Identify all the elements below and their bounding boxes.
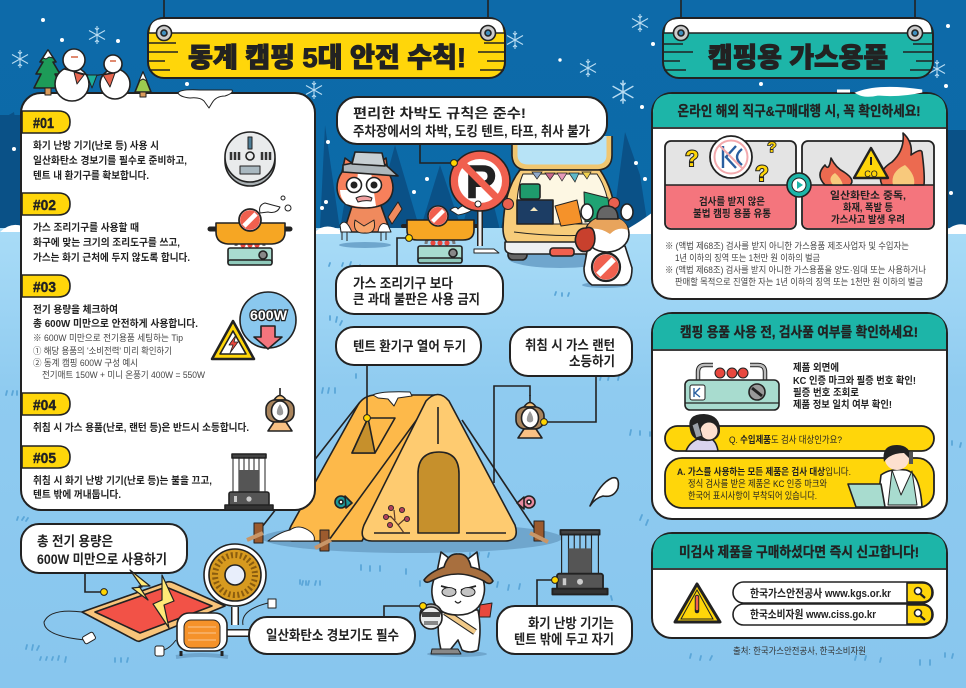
icon: play arrow (787, 173, 811, 197)
lantern with callout line (494, 376, 596, 483)
fan (204, 544, 276, 633)
icon: warning triangle (675, 584, 720, 622)
legal notes: 판매할 목적으로 진열한 자는 1년 이하의 징역 또는 1천만 원 이하의 벌금 (675, 276, 923, 287)
rule 02: 화구에 맞는 크기의 조리도구를 쓰고, (33, 236, 180, 249)
card: accident risks: 일산화탄소 중독, (830, 189, 906, 202)
rule 02: 가스 조리기구를 사용할 때 (33, 221, 139, 234)
no parking sign (450, 151, 510, 253)
card: accident risks: 화재, 폭발 등 (843, 201, 893, 214)
rule 01: 일산화탄소 경보기를 필수로 준비하고, (33, 154, 187, 167)
title banner: gas products (663, 0, 933, 78)
icon: oversized pan on stove (210, 196, 291, 265)
rule 05 (22, 446, 212, 501)
callout: no car camping (337, 97, 607, 166)
check instructions: 제품 정보 일치 여부 확인! (793, 398, 892, 411)
icon: lantern (266, 388, 294, 431)
electric mat (44, 570, 225, 644)
snow pile (268, 527, 314, 541)
open car with camping gear (502, 136, 620, 268)
search bar: Korea Consumer Agency: 한국소비자원 www.ciss.go.kr (750, 607, 877, 621)
rule 01 (22, 111, 187, 182)
stars and snowflakes (12, 14, 953, 210)
legal notes (665, 240, 926, 287)
icon: woman on phone (686, 414, 720, 451)
callout: open tent vent: 텐트 환기구 열어 두기 (353, 339, 466, 354)
tent (247, 392, 548, 551)
rule 03: ※ 600W 미만으로 전기용품 세팅하는 Tip (33, 333, 183, 343)
check instructions: KC 인증 마크와 필증 번호 확인! (793, 374, 916, 387)
rule 04: #04 (33, 397, 57, 414)
rule 04: 취침 시 가스 용품(난로, 랜턴 등)은 반드시 소등합니다. (33, 421, 249, 434)
panel: report uninspected products (652, 533, 947, 638)
rule 04 (22, 393, 249, 434)
gas stove with oversized griddle (403, 205, 478, 263)
source note: 출처: 한국가스안전공사, 한국소비자원 (733, 645, 866, 656)
legal notes: ※ (액법 제68조) 검사를 받지 아니한 가스용품을 양도·임대 또는 사용하거나 (665, 264, 926, 275)
card: illegal products: ? (767, 139, 777, 156)
snow drip on panel (178, 90, 232, 108)
tent clips (335, 496, 352, 508)
rule 03: 전기 용량을 체크하여 (33, 303, 118, 316)
tent vent (352, 418, 395, 453)
legal notes: ※ (액법 제68조) 검사를 받지 아니한 가스용품 제조사업자 및 수입자는 (665, 240, 909, 251)
rule 05: 취침 시 화기 난방 기기(난로 등)는 불을 끄고, (33, 474, 212, 487)
title banner: gas products: 캠핑용 가스용품 (708, 43, 888, 73)
hamster with no sign (575, 204, 633, 288)
callout: open tent vent (336, 327, 481, 421)
panel: overseas purchase warning (652, 88, 947, 299)
stakes (254, 521, 544, 551)
callout: total power: 총 전기 용량은 (37, 534, 113, 549)
card: accident risks: 가스사고 발생 우려 (831, 213, 905, 226)
answer bar: 정식 검사를 받은 제품은 KC 인증 마크와 (688, 478, 827, 490)
answer bar: 한국어 표시사항이 부착되어 있습니다. (688, 490, 817, 502)
small electric heater (155, 613, 228, 657)
callout: no oversized griddle: 가스 조리기구 보다 (353, 276, 454, 291)
search bar: KGS (733, 582, 933, 603)
rule 02: 가스는 화기 근처에 두지 않도록 합니다. (33, 251, 190, 264)
card: illegal products: 불법 캠핑 용품 유통 (693, 207, 771, 220)
night sky background (0, 0, 966, 240)
shadow under tent (262, 523, 562, 553)
callout: turn off lantern: 취침 시 가스 랜턴 (525, 338, 615, 353)
icon: gas stove with KC mark (685, 365, 779, 410)
callout: total power: 600W 미만으로 사용하기 (37, 552, 167, 567)
answer bar (665, 458, 934, 508)
callout: total power (21, 524, 187, 595)
white cat explorer (420, 552, 493, 657)
icon: crossed KC mark (710, 136, 752, 178)
card: accident risks (802, 133, 934, 229)
icon: kerosene heater (225, 454, 273, 510)
callout: turn off lantern (510, 327, 632, 376)
icon: call center agent (848, 445, 922, 507)
rule 05: #05 (33, 450, 56, 467)
boxes and cushion (520, 184, 540, 199)
search bar: KGS: 한국가스안전공사 www.kgs.or.kr (750, 586, 892, 600)
callout: no oversized griddle (336, 238, 503, 314)
panel: check certification (652, 313, 947, 519)
check instructions: 필증 번호 조회로 (793, 386, 859, 399)
rule 03: ① 해당 용품의 '소비전력' 미리 확인하기 (33, 345, 172, 356)
orange cat (337, 152, 402, 248)
panel: check certification: 캠핑 용품 사용 전, 검사품 여부를 확인하세요! (680, 324, 918, 340)
heater by the tent (537, 478, 618, 606)
search bar: Korea Consumer Agency (733, 604, 933, 625)
rule 03: 전기매트 150W + 미니 온풍기 400W = 550W (42, 370, 205, 380)
bunting (532, 172, 591, 182)
panel: overseas purchase warning: 온라인 해외 직구&구매대행 시, 꼭 확인하세요! (678, 103, 920, 119)
snowmen and trees (34, 49, 151, 101)
callout: heater outside tent: 화기 난방 기기는 (528, 616, 614, 631)
icon: carbon monoxide alarm (225, 132, 275, 186)
snow on panel (837, 88, 922, 95)
icon: handheld alarm (420, 604, 442, 629)
rule 02: #02 (33, 197, 56, 214)
rule 03: 총 600W 미만으로 안전하게 사용합니다. (33, 317, 198, 330)
rule 03: #03 (33, 279, 56, 296)
callout: heater outside tent: 텐트 밖에 두고 자기 (514, 632, 614, 647)
callout: turn off lantern: 소등하기 (569, 354, 615, 369)
title banner: winter camping rules: 동계 캠핑 5대 안전 수칙! (188, 43, 466, 73)
card: illegal products: ? (755, 161, 769, 186)
panel: five safety rules (21, 90, 315, 510)
no parking sign: P (466, 156, 496, 208)
forest silhouette (0, 112, 966, 240)
icon: lightning bolts (130, 570, 174, 628)
snow on tent (373, 392, 412, 406)
snowy ground (0, 228, 966, 688)
callout: CO alarm required: 일산화탄소 경보기도 필수 (266, 628, 399, 643)
legal notes: 1년 이하의 징역 또는 1천만 원 이하의 벌금 (675, 253, 820, 263)
question marks: ? (685, 146, 699, 171)
rule 05: 텐트 밖에 꺼내둡니다. (33, 488, 121, 501)
icon: flames (820, 133, 924, 185)
icon: 600W limit: 600W (250, 307, 288, 323)
question bar: Q. 수입제품도 검사 대상인가요? (729, 434, 842, 446)
rule 02 (22, 193, 190, 264)
answer bar: A. 가스를 사용하는 모든 제품은 검사 대상입니다. (677, 466, 851, 478)
check instructions: 제품 외면에 (793, 361, 839, 374)
card: illegal products: 검사를 받지 않은 (699, 195, 765, 208)
check instructions (793, 361, 916, 411)
callout: CO alarm required (249, 606, 423, 654)
icon: 600W limit (212, 292, 296, 359)
callout: no car camping: 주차장에서의 차박, 도킹 텐트, 타프, 취사 불가 (353, 124, 591, 139)
rule 01: #01 (33, 115, 54, 132)
panel: report uninspected products: 미검사 제품을 구매하셨다면 즉시 신고합니다! (679, 544, 919, 560)
icon: CO warning: CO (864, 169, 878, 179)
tent door (418, 452, 459, 533)
snow mounds (0, 212, 966, 234)
callout: no oversized griddle: 큰 과대 불판은 사용 금지 (353, 292, 480, 307)
rule 01: 화기 난방 기기(난로 등) 사용 시 (33, 139, 159, 152)
rule 01: 텐트 내 환기구를 확보합니다. (33, 169, 149, 182)
title banner: winter camping rules (148, 0, 505, 78)
rule 03 (22, 275, 205, 380)
grass tufts (6, 262, 961, 665)
callout: no car camping: 편리한 차박도 규칙은 준수! (353, 106, 526, 121)
card: illegal products (665, 136, 796, 229)
question bar (665, 426, 934, 451)
berry branch (385, 510, 406, 533)
callout: heater outside tent (497, 606, 632, 654)
rule 03: ② 동계 캠핑 600W 구성 예시 (33, 357, 138, 368)
